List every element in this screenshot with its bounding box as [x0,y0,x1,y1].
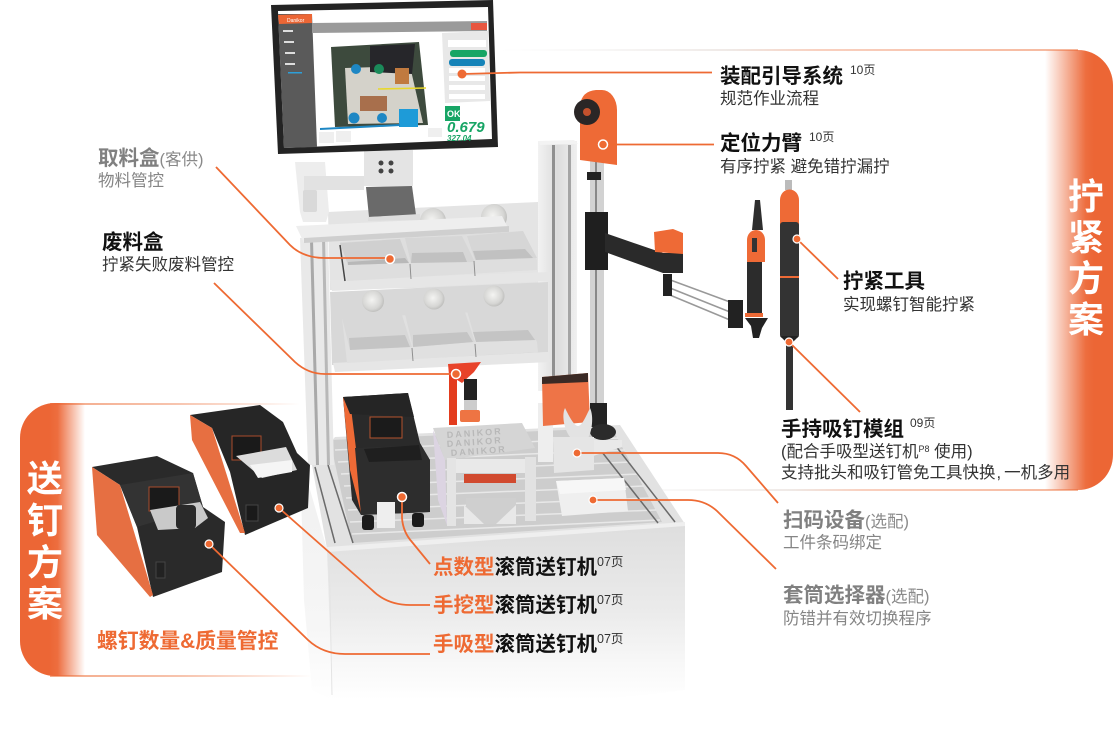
callout: handheld suction module [781,338,1070,482]
material bins, lower row [342,310,538,363]
screen sidebar: Danikor [287,18,305,24]
screen OK result: 0.679 [447,119,485,136]
heading: tightening solution: 案 [1068,299,1104,340]
label: barcode scanner: 扫码设备(选配) [783,509,909,532]
screen work image [319,42,442,143]
centre fixture with DANIKOR top: DANIKOR [446,426,503,440]
label: hand-pick feeder: 07页 [597,593,623,607]
heading: screw feeding solution [27,458,63,624]
label: handheld suction module: P8 [918,444,930,454]
table body [300,455,685,700]
label: tightening tool: 实现螺钉智能拧紧 [843,295,975,314]
label: positioning arm: 有序拧紧 避免错拧漏拧 [720,157,890,176]
label: material box: 物料管控 [98,171,164,190]
label: socket selector: 套筒选择器(选配) [783,584,930,607]
positioning arm head [574,90,617,165]
label: assembly guidance: 10页 [850,63,875,77]
panel: tightening solution frame [500,49,1113,491]
workstation frame and table [296,140,685,700]
heading: tightening solution: 方 [1068,258,1104,299]
heading: screw feeding solution: 钉 [27,500,63,541]
panel: screw feeding solution frame [20,403,312,677]
centre fixture with DANIKOR top: DANIKOR [450,444,507,458]
suction screw feeder [92,456,225,597]
callout: hand-pick feeder [275,504,623,617]
screen step list [442,31,490,103]
label: assembly guidance: 规范作业流程 [720,89,819,108]
arm-mounted screwdriver [745,200,768,338]
label: waste box: 拧紧失败废料管控 [102,255,234,274]
screen OK result: 327.04 [447,134,472,143]
label: suction feeder: 07页 [597,632,623,646]
callout: positioning arm [598,130,890,176]
heading: tightening solution: 拧 [1068,176,1104,217]
label: barcode scanner: 工件条码绑定 [783,533,882,552]
callout: tightening tool [793,235,975,314]
label: handheld suction module: 09页 [910,416,935,430]
callout: dot-count feeder [398,492,623,579]
lower shelf [330,282,550,372]
monitor stand and arm [295,150,420,222]
label: positioning arm [720,130,890,176]
heading: screw feeding solution: 送 [27,458,63,499]
label: dot-count feeder: 点数型滚筒送钉机 [433,556,597,579]
table top plate [312,425,685,552]
aluminium right column [538,140,578,391]
callout: suction feeder [205,540,623,656]
label: assembly guidance [720,63,875,108]
label: tightening tool [843,269,975,314]
callout: barcode scanner [573,449,909,552]
label: handheld suction module [781,416,1070,482]
callout: material box [98,146,394,264]
label: hand-pick feeder: 手挖型滚筒送钉机 [433,594,597,617]
screen sidebar [278,14,317,148]
label: assembly guidance: 装配引导系统 [720,65,843,88]
label: handheld suction module: (配合手吸型送钉机 [781,443,918,461]
label: waste box: 废料盒 [102,230,164,254]
label: dot-count feeder: 07页 [597,555,623,569]
screen top bar [312,21,487,33]
label: positioning arm: 定位力臂 [720,132,802,155]
controller and suction holder [538,373,628,516]
label: socket selector [783,584,932,628]
aluminium left post [300,236,334,465]
material bins, upper row [340,231,537,281]
centre fixture with DANIKOR top: DANIKOR [446,435,503,449]
centre fixture with DANIKOR top [433,423,536,526]
callout: waste box [102,230,460,378]
label: positioning arm: 10页 [809,130,834,144]
heading: tightening solution: 紧 [1068,217,1104,258]
label: barcode scanner [783,509,909,552]
handheld screwdriver [780,180,799,410]
red camera bracket [448,362,481,425]
label: socket selector: 防错并有效切换程序 [783,609,932,628]
caption: screw count and quality control: 螺钉数量&质量管控 [97,630,279,653]
label: handheld suction module: 手持吸钉模组 [781,418,904,441]
label: waste box [102,230,234,274]
monitor with assembly guidance screen [271,0,498,154]
dot-count screw feeder [343,393,430,530]
socket selector box [556,478,628,516]
label: handheld suction module: 使用) [930,442,973,461]
hand-pick screw feeder [190,405,310,535]
label: tightening tool: 拧紧工具 [843,269,925,293]
heading: screw feeding solution: 案 [27,583,63,624]
top shelf [296,202,550,291]
heading: tightening solution [1068,176,1104,340]
label: handheld suction module: 支持批头和吸钉管免工具快换,一机多用 [781,463,1070,482]
torque arm [574,90,768,415]
label: material box [98,146,204,190]
screen OK result [445,106,485,143]
callout: assembly guidance system [458,63,875,108]
label: suction feeder: 手吸型滚筒送钉机 [433,633,597,656]
scanner holder [553,408,594,473]
heading: screw feeding solution: 方 [27,542,63,583]
label: material box: 取料盒(客供) [98,146,204,170]
screen OK result: OK [447,109,461,119]
callout: socket selector [589,496,932,628]
